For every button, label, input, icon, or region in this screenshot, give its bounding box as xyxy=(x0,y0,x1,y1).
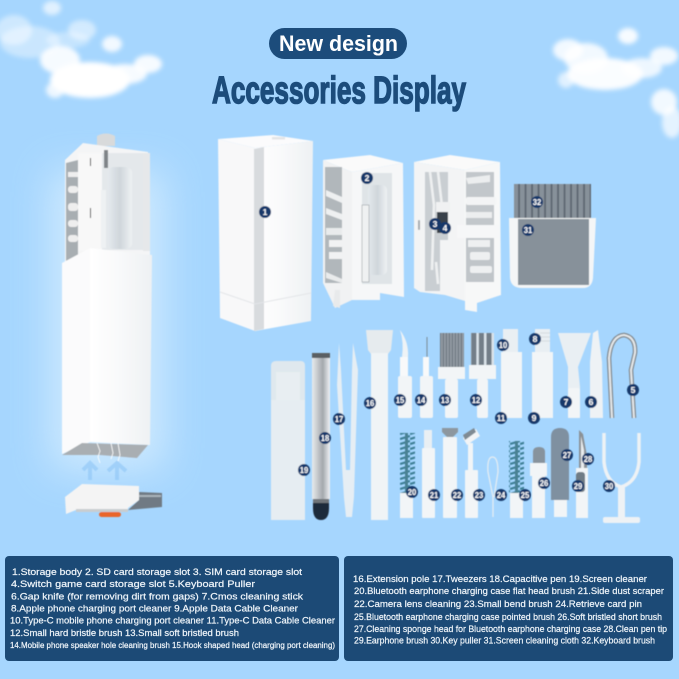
panel: legend items 16 to 32: 16.Extension pole 17.Tweezers 18.Capacitive pen 19.Screen cleaner xyxy=(353,573,647,584)
tool 25: pointed brush: 25 xyxy=(521,490,529,500)
cloth 31: 31 xyxy=(524,225,532,235)
panel: legend items 1 to 15 xyxy=(5,556,339,661)
tool 12: hard bristle brush: 12 xyxy=(472,395,480,405)
tool 13: soft bristled brush xyxy=(438,333,465,418)
tool 19: screen cleaner bottle xyxy=(271,361,310,520)
product: main device with sleeve pulled down xyxy=(62,134,162,517)
title: Accessories Display xyxy=(212,70,466,112)
marker 1: 1 xyxy=(263,207,268,217)
tool 26: soft bristled short brush: 26 xyxy=(540,478,548,488)
tool 15: hook shaped head: 15 xyxy=(396,395,404,405)
tool 20: flat head brush xyxy=(400,433,418,518)
panel: legend items 16 to 32: 25.Bluetooth earphone charging case pointed brush 26.Soft bristled short brush xyxy=(354,611,662,622)
inner cartridge xyxy=(65,143,150,262)
panel: legend items 1 to 15: 4.Switch game card storage slot 5.Keyboard Puller xyxy=(11,578,255,589)
clouds: top left xyxy=(0,1,162,98)
tool 18: capacitive pen: 18 xyxy=(321,433,329,443)
tool 7: Cmos cleaning stick xyxy=(558,333,591,418)
marker 2: 2 xyxy=(365,173,370,183)
static sparks and suction arrows xyxy=(83,443,126,480)
tool 8 and 9: Apple cleaners: 9 xyxy=(532,413,537,423)
tool 19: screen cleaner bottle: 19 xyxy=(300,465,308,475)
tool 5: keyboard puller: 5 xyxy=(631,385,636,395)
product: cartridge back with slots 3 and 4 xyxy=(414,155,501,312)
tool 6: gap knife: 6 xyxy=(589,397,594,407)
marker 2 xyxy=(361,172,373,184)
tool 27: cleaning sponge head: 27 xyxy=(563,450,571,460)
tool 8 and 9: Apple cleaners xyxy=(528,329,553,424)
panel: legend items 1 to 15: 6.Gap knife (for removing dirt from gaps) 7.Cmos cleaning stick xyxy=(11,590,303,602)
tool 13: soft bristled brush: 13 xyxy=(441,395,449,405)
panel: legend items 1 to 15: 8.Apple phone charging port cleaner 9.Apple Data Cable Cleaner xyxy=(11,602,298,614)
tool 12: hard bristle brush xyxy=(469,333,496,418)
tool 15: hook shaped head xyxy=(394,330,412,418)
tool 21: side dust scraper xyxy=(422,430,440,518)
tool 10 and 11: Type-C cleaners: 11 xyxy=(497,413,505,423)
tool 14: speaker hole brush: 14 xyxy=(417,395,425,405)
panel: legend items 1 to 15: 12.Small hard bristle brush 13.Small soft bristled brush xyxy=(10,627,239,638)
tool 22: camera lens cleaning: 22 xyxy=(453,490,461,500)
tool 16: extension pole xyxy=(364,330,393,520)
tool 7: Cmos cleaning stick: 7 xyxy=(564,397,569,407)
tool 23: small bend brush: 23 xyxy=(475,490,483,500)
panel: legend items 1 to 15: 1.Storage body 2. SD card storage slot 3. SIM card storage slot xyxy=(12,566,302,577)
keyboard brush 32: 32 xyxy=(533,197,541,207)
tool 14: speaker hole brush xyxy=(415,337,433,418)
tool 17: tweezers: 17 xyxy=(335,414,343,424)
tool 18: capacitive pen xyxy=(312,353,331,520)
badge: New design: New design xyxy=(279,31,398,56)
tool 25: pointed brush xyxy=(509,441,531,518)
tool 6: gap knife xyxy=(585,330,603,418)
brush puck xyxy=(65,484,162,517)
tool 30: key puller xyxy=(603,433,640,523)
tool 28 and 29: pen tip and earphone brush: 29 xyxy=(574,481,582,491)
panel: legend items 16 to 32: 20.Bluetooth earphone charging case flat head brush 21.Side dust scraper xyxy=(354,585,664,596)
tool 28 and 29: pen tip and earphone brush: 28 xyxy=(584,454,592,464)
marker 4: 4 xyxy=(443,223,448,233)
product: storage body xyxy=(218,135,313,331)
tool 24: retrieve card pin xyxy=(488,457,507,517)
marker 3 xyxy=(429,218,441,230)
marker 1 xyxy=(259,206,271,218)
marker 4 xyxy=(439,222,451,234)
tool 10 and 11: Type-C cleaners: 10 xyxy=(499,340,507,350)
panel: legend items 1 to 15: 10.Type-C mobile phone charging port cleaner 11.Type-C Data Cable Cleaner xyxy=(10,614,335,626)
tool 23: small bend brush xyxy=(463,428,485,518)
glow behind main device xyxy=(50,170,165,470)
marker 3: 3 xyxy=(433,219,438,229)
panel: legend items 16 to 32: 22.Camera lens cleaning 23.Small bend brush 24.Retrieve card pin xyxy=(354,598,642,609)
tool 21: side dust scraper: 21 xyxy=(430,490,438,500)
sleeve xyxy=(62,248,152,458)
tool 16: extension pole: 16 xyxy=(366,398,374,408)
tool 30: key puller: 30 xyxy=(605,481,613,491)
tool 28 and 29: pen tip and earphone brush xyxy=(572,430,594,518)
tool 8 and 9: Apple cleaners: 8 xyxy=(533,334,538,344)
all small tools xyxy=(271,329,640,523)
tool 10 and 11: Type-C cleaners xyxy=(495,329,522,424)
panel: legend items 16 to 32 xyxy=(344,556,673,661)
product: cartridge front with slot 2 xyxy=(323,155,404,308)
tool 26: soft bristled short brush xyxy=(530,447,550,518)
panel: legend items 1 to 15: 14.Mobile phone speaker hole cleaning brush 15.Hook shaped head (charging port cleaning) xyxy=(10,641,335,650)
top knob xyxy=(97,134,115,146)
product: screen cloth and keyboard brush xyxy=(509,184,596,288)
panel: legend items 16 to 32: 29.Earphone brush 30.Key puller 31.Screen cleaning cloth 32.Keyboard brush xyxy=(354,634,655,646)
tool 27: cleaning sponge head xyxy=(551,428,573,517)
tool 5: keyboard puller xyxy=(609,335,639,418)
tool 24: retrieve card pin: 24 xyxy=(497,490,505,500)
tool 17: tweezers xyxy=(333,343,358,517)
clouds: top right xyxy=(553,28,679,138)
tool 22: camera lens cleaning xyxy=(442,428,463,518)
tool 20: flat head brush: 20 xyxy=(408,487,416,497)
